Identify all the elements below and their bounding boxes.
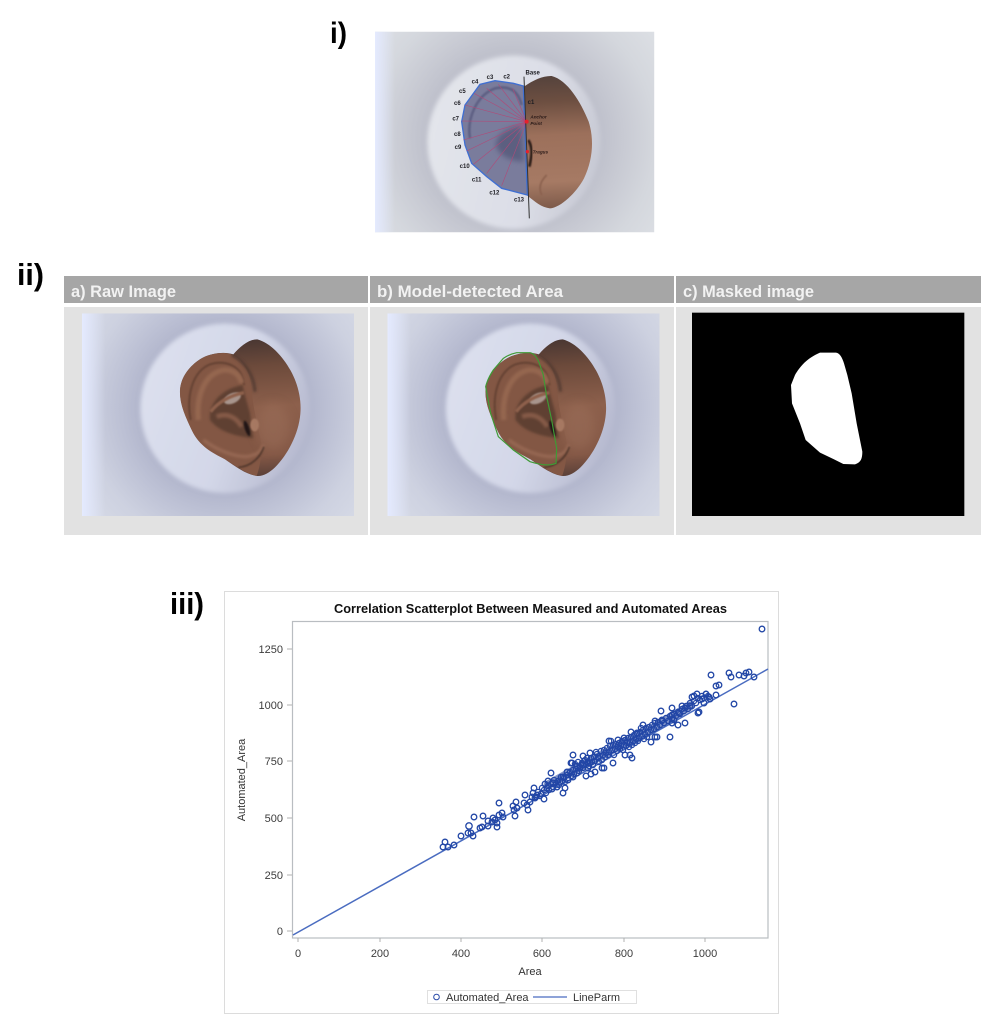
contour labels: c2 <box>503 74 511 80</box>
contour labels: c13 <box>514 198 525 204</box>
y axis ticks and labels: 500 <box>265 813 283 825</box>
header: masked image: c) Masked image <box>683 282 814 301</box>
header: raw image <box>64 276 368 303</box>
regression line <box>293 669 768 935</box>
contour labels: c9 <box>455 145 462 151</box>
panel ii: three-column image table <box>64 276 981 535</box>
contour labels: c1 <box>528 100 535 106</box>
header: model-detected area: b) Model-detected Area <box>377 282 564 301</box>
measurement rays <box>462 84 527 186</box>
contour labels: c10 <box>460 164 470 170</box>
y axis ticks and labels: 250 <box>265 870 283 882</box>
header: raw image: a) Raw Image <box>71 282 176 301</box>
head skin <box>524 76 592 208</box>
label: iii): iii) <box>170 586 204 621</box>
x axis ticks and labels: 200 <box>371 948 389 960</box>
x axis title: Area <box>518 966 542 978</box>
header: masked image <box>676 276 981 303</box>
landmark labels: Point <box>530 121 542 126</box>
contour labels <box>452 71 540 204</box>
panel iii: correlation scatterplot <box>224 592 778 1014</box>
x axis ticks and labels: 1000 <box>693 948 717 960</box>
x axis ticks and labels: 400 <box>452 948 470 960</box>
landmark labels: Anchor <box>529 115 548 120</box>
panel i: annotated ear photograph <box>375 32 654 232</box>
chart title: Correlation Scatterplot Between Measured and Automated Areas <box>334 602 727 616</box>
landmark labels <box>529 115 549 155</box>
shaded ear region <box>462 81 527 195</box>
landmark labels: Tragus <box>533 150 549 155</box>
contour labels: c11 <box>472 178 482 184</box>
base line <box>524 77 529 218</box>
y axis ticks and labels: 1000 <box>259 700 283 712</box>
image: model-detected ear photo with outline <box>387 313 659 516</box>
label: i): i) <box>330 17 347 50</box>
cell backgrounds <box>64 307 981 535</box>
image: raw ear photo <box>82 313 354 516</box>
legend: Automated_Area <box>446 992 529 1004</box>
y axis ticks and labels: 750 <box>265 756 283 768</box>
contour labels: c6 <box>454 101 461 107</box>
x axis ticks and labels <box>295 938 717 960</box>
legend: LineParm <box>573 992 620 1004</box>
contour labels: c7 <box>452 117 460 123</box>
y axis ticks and labels: 1250 <box>259 644 283 656</box>
contour labels: c3 <box>487 75 494 81</box>
contour labels: c8 <box>454 132 461 138</box>
y axis ticks and labels: 0 <box>277 926 283 938</box>
x axis ticks and labels: 600 <box>533 948 551 960</box>
red landmark points <box>525 120 529 153</box>
x axis ticks and labels: 800 <box>615 948 633 960</box>
y axis ticks and labels <box>259 644 292 938</box>
image: binary mask <box>692 313 964 516</box>
contour labels: c4 <box>472 79 479 85</box>
contour labels: c5 <box>459 89 466 95</box>
label: ii): ii) <box>17 257 44 292</box>
x axis ticks and labels: 0 <box>295 948 301 960</box>
header: model-detected area <box>370 276 674 303</box>
contour labels: c12 <box>489 190 500 196</box>
plot frame <box>292 622 768 938</box>
scatter points <box>440 626 765 850</box>
y axis title: Automated_Area <box>236 738 248 821</box>
contour labels: Base <box>526 71 540 77</box>
legend <box>428 990 636 1004</box>
